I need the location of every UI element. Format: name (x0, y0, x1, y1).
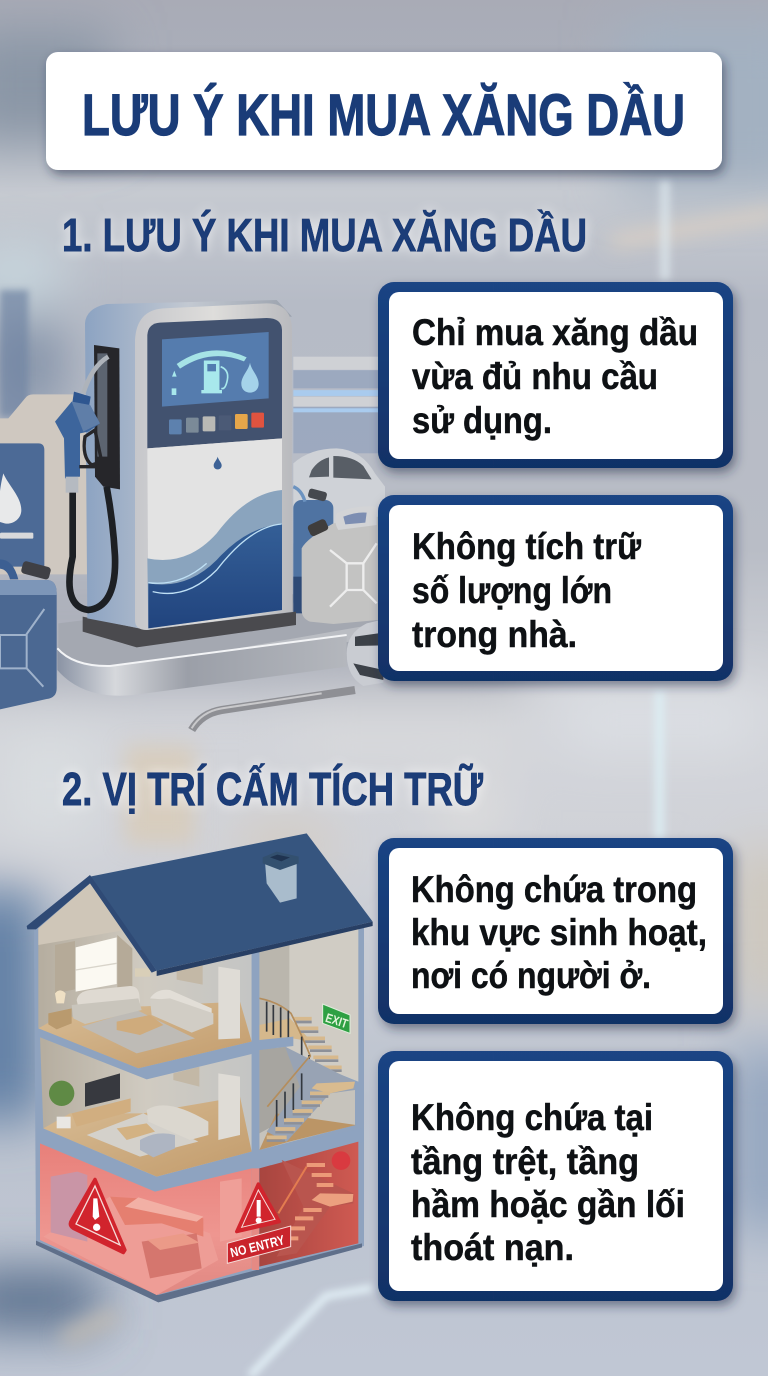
card 1: sử dụng. (412, 400, 552, 441)
heading: section 1: 1. LƯU Ý KHI MUA XĂNG DẦU (62, 209, 587, 261)
nozzle and hose (55, 345, 120, 610)
card 2: trong nhà. (412, 614, 577, 655)
warning sign right (237, 1184, 279, 1232)
card 3: nơi có người ở. (411, 955, 651, 996)
card 2: Không tích trữ (412, 526, 641, 567)
card 4: tầng trệt, tầng (411, 1141, 639, 1182)
pump head panel (147, 318, 282, 448)
card 1: vừa đủ nhu cầu (412, 356, 658, 397)
middle left room (40, 1037, 252, 1177)
buttons (169, 413, 264, 434)
roof (27, 833, 373, 976)
screen (162, 332, 269, 407)
pump base (83, 612, 296, 647)
lower stair flight (267, 1093, 330, 1141)
sofa back wall (72, 986, 142, 1024)
card 2: số lượng lớn (412, 570, 612, 611)
background: road and wall stripes (0, 290, 380, 730)
navy jerry can behind (293, 487, 333, 613)
illustration: fuel pump with jerry cans (0, 290, 385, 730)
card 4: Không chứa tại (411, 1097, 653, 1138)
chimney (263, 852, 299, 903)
pump body front (135, 303, 292, 630)
platform (57, 583, 380, 696)
card 3: Không chứa trong (411, 869, 697, 910)
exit sign: EXIT (324, 1011, 350, 1031)
warning sign left (70, 1179, 125, 1253)
silver jerry can (302, 506, 378, 624)
card 2 (378, 495, 733, 681)
illustration: house cutaway (27, 833, 373, 1302)
top right room (259, 928, 358, 1107)
side table and lamp (48, 968, 150, 1029)
car (293, 448, 385, 686)
top left room (38, 883, 252, 1068)
shell (34, 877, 364, 1302)
card 4 (378, 1051, 733, 1301)
exit sign (323, 1004, 350, 1033)
card 4: thoát nạn. (411, 1227, 574, 1268)
danger room right (259, 1142, 358, 1267)
card 3 (378, 838, 733, 1024)
blue jerry can, left (0, 559, 57, 709)
card 1 (378, 282, 733, 468)
coffee table (117, 1015, 163, 1035)
sofa right wall (150, 990, 213, 1033)
no entry sign: NO ENTRY (229, 1232, 286, 1260)
slabs and posts (37, 948, 363, 1193)
middle right room (259, 1047, 356, 1150)
heading: section 2: 2. VỊ TRÍ CẤM TÍCH TRỮ (62, 763, 484, 815)
background jerry can (0, 394, 88, 574)
title card (46, 52, 722, 170)
card 4: hầm hoặc gần lối (411, 1184, 685, 1225)
upper stair flight (293, 1019, 342, 1071)
lower panel (147, 438, 282, 628)
pump body side (85, 300, 292, 630)
card 3: khu vực sinh hoạt, (411, 912, 707, 953)
card 1: Chỉ mua xăng dầu (412, 312, 698, 353)
danger room left (40, 1143, 252, 1295)
